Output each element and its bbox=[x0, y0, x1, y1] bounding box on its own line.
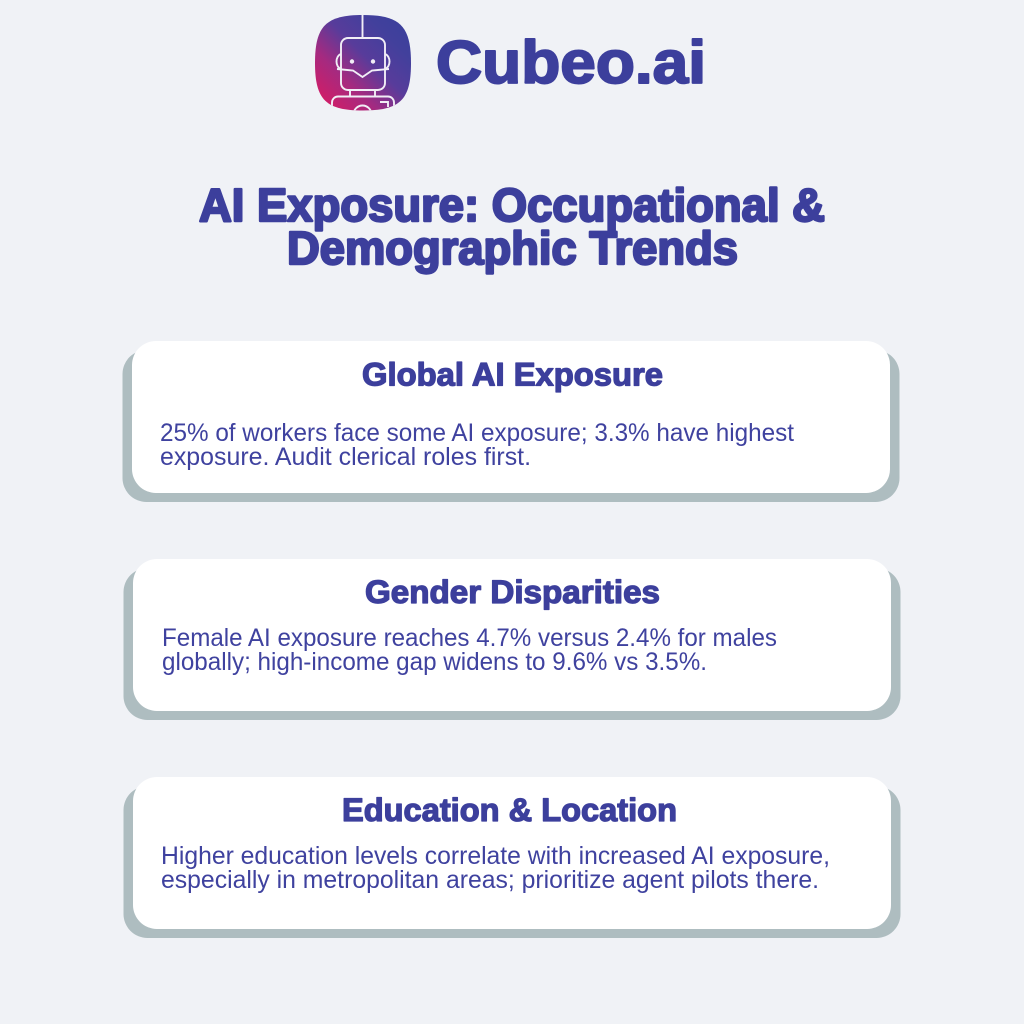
heading: Gender Disparities: Gender Disparities bbox=[365, 574, 660, 610]
title: AI Exposure: Occupational & bbox=[199, 179, 825, 231]
text: Global AI Exposure body: 25% of workers face some AI exposure; 3.3% have highest bbox=[160, 419, 794, 447]
panel: Global AI Exposure bbox=[122, 341, 900, 502]
title bbox=[199, 179, 825, 274]
heading: Global AI Exposure: Global AI Exposure bbox=[362, 356, 663, 392]
title: Demographic Trends bbox=[287, 222, 738, 274]
text: Gender Disparities body: Female AI exposure reaches 4.7% versus 2.4% for males bbox=[162, 624, 777, 652]
text: Gender Disparities body bbox=[162, 624, 777, 676]
text: Global AI Exposure body bbox=[160, 419, 794, 471]
text: Education & Location body bbox=[161, 842, 830, 894]
text: Education & Location body: especially in metropolitan areas; prioritize agent pilots there. bbox=[161, 866, 819, 894]
panel: Education & Location bbox=[124, 777, 900, 938]
text: Education & Location body: Higher education levels correlate with increased AI exposure, bbox=[161, 842, 830, 870]
heading: Education & Location: Education & Location bbox=[342, 792, 677, 828]
text: Global AI Exposure body: exposure. Audit clerical roles first. bbox=[160, 443, 531, 471]
logo icon bbox=[315, 15, 411, 110]
text: Gender Disparities body: globally; high-income gap widens to 9.6% vs 3.5%. bbox=[162, 648, 707, 676]
logo wordmark: Cubeo.ai bbox=[436, 29, 706, 96]
panel: Gender Disparities bbox=[124, 559, 900, 720]
